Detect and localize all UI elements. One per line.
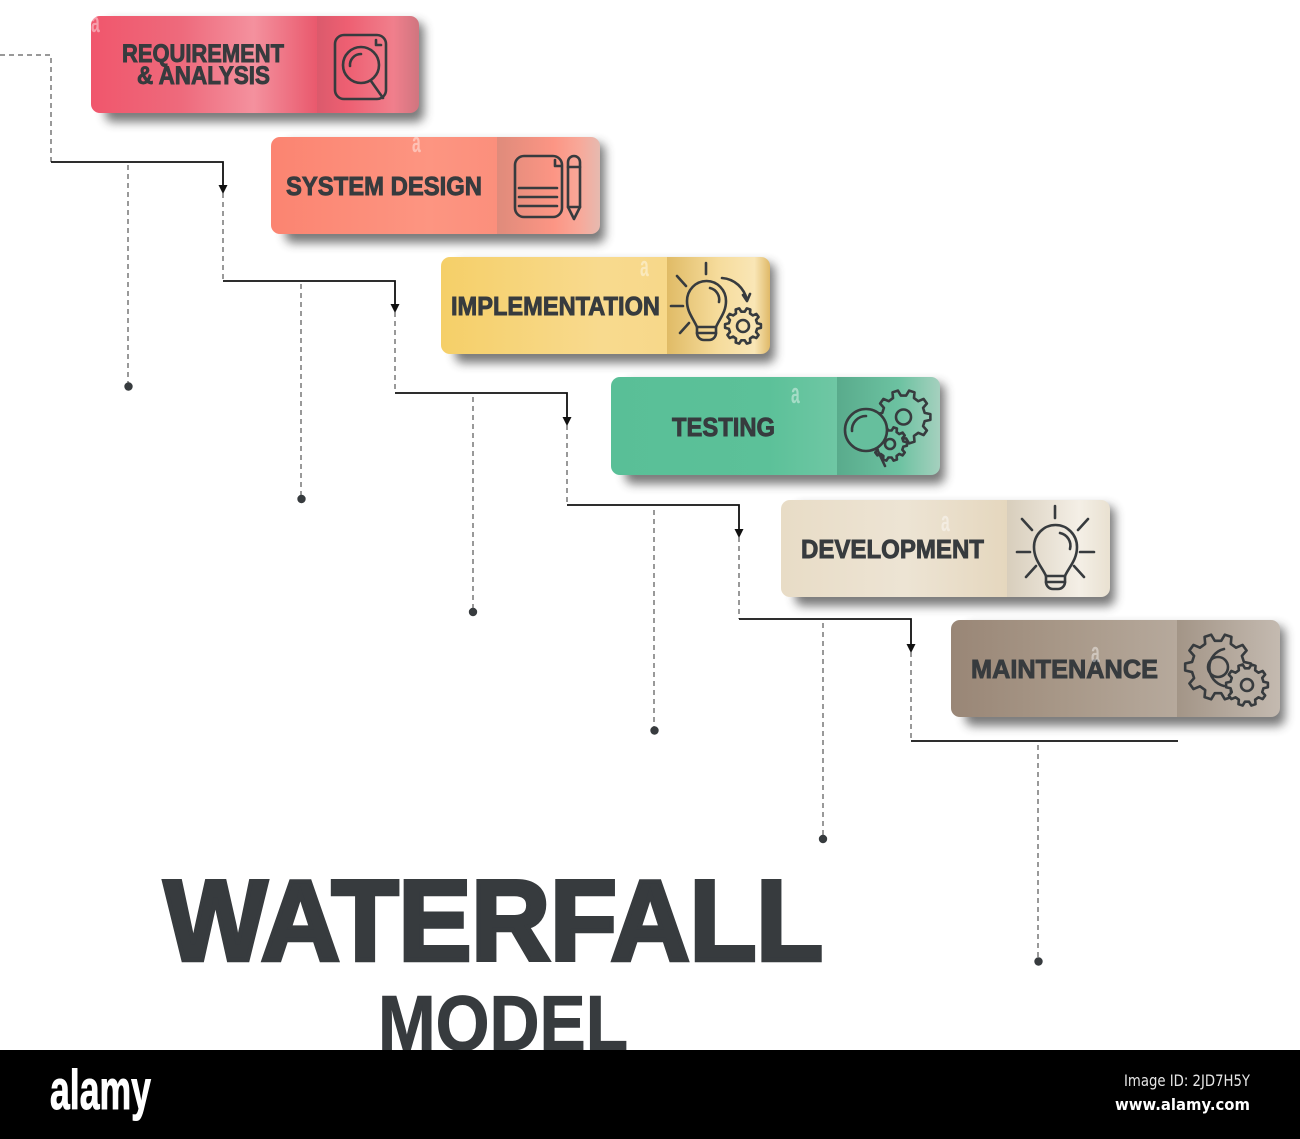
watermarks [91,6,1100,668]
drop line with dot: step 4 [650,510,659,735]
label: SYSTEM DESIGN [286,171,482,201]
label: DEVELOPMENT [801,534,984,564]
watermarks: a [640,250,649,282]
label: MAINTENANCE [971,654,1158,684]
label: IMPLEMENTATION [451,291,660,321]
flow connector lines [0,55,1178,741]
subtitle: model: MODEL [378,979,628,1067]
label: TESTING [672,412,775,442]
icon: document and pencil [515,156,580,219]
panel: development [781,500,1115,606]
panel: requirement and analysis [91,16,424,122]
drop line with dot: step 6 [1034,745,1043,966]
title: waterfall: WATERFALL [164,858,823,985]
watermarks: a [412,126,421,158]
panel: implementation [441,257,775,363]
label: & ANALYSIS [137,62,270,90]
icon: magnifier and gears [845,391,930,466]
drop line with dot: step 3 [469,397,477,616]
icon: light bulb [1017,506,1094,589]
icon: two gears [1185,635,1268,706]
watermarks: a [91,6,100,38]
panel: testing [611,377,945,484]
drop line with dot: step 1 [124,165,133,391]
panel: maintenance [951,620,1285,726]
arrowheads [218,185,916,653]
footer image id: Image ID: 2JD7H5Y [1124,1071,1250,1090]
icon: document with magnifier [335,35,386,99]
panel: system design [271,137,605,243]
icon: bulb, arrow and gear [671,263,761,344]
watermarks: a [791,377,800,409]
drop line with dot: step 2 [297,284,306,503]
footer url: www.alamy.com [1115,1095,1250,1114]
watermarks: a [1091,636,1100,668]
label: REQUIREMENT [122,40,284,68]
footer logo: alamy [50,1058,151,1121]
footer band [0,1050,1300,1139]
watermarks: a [941,505,950,537]
drop line with dot: step 5 [819,623,827,843]
